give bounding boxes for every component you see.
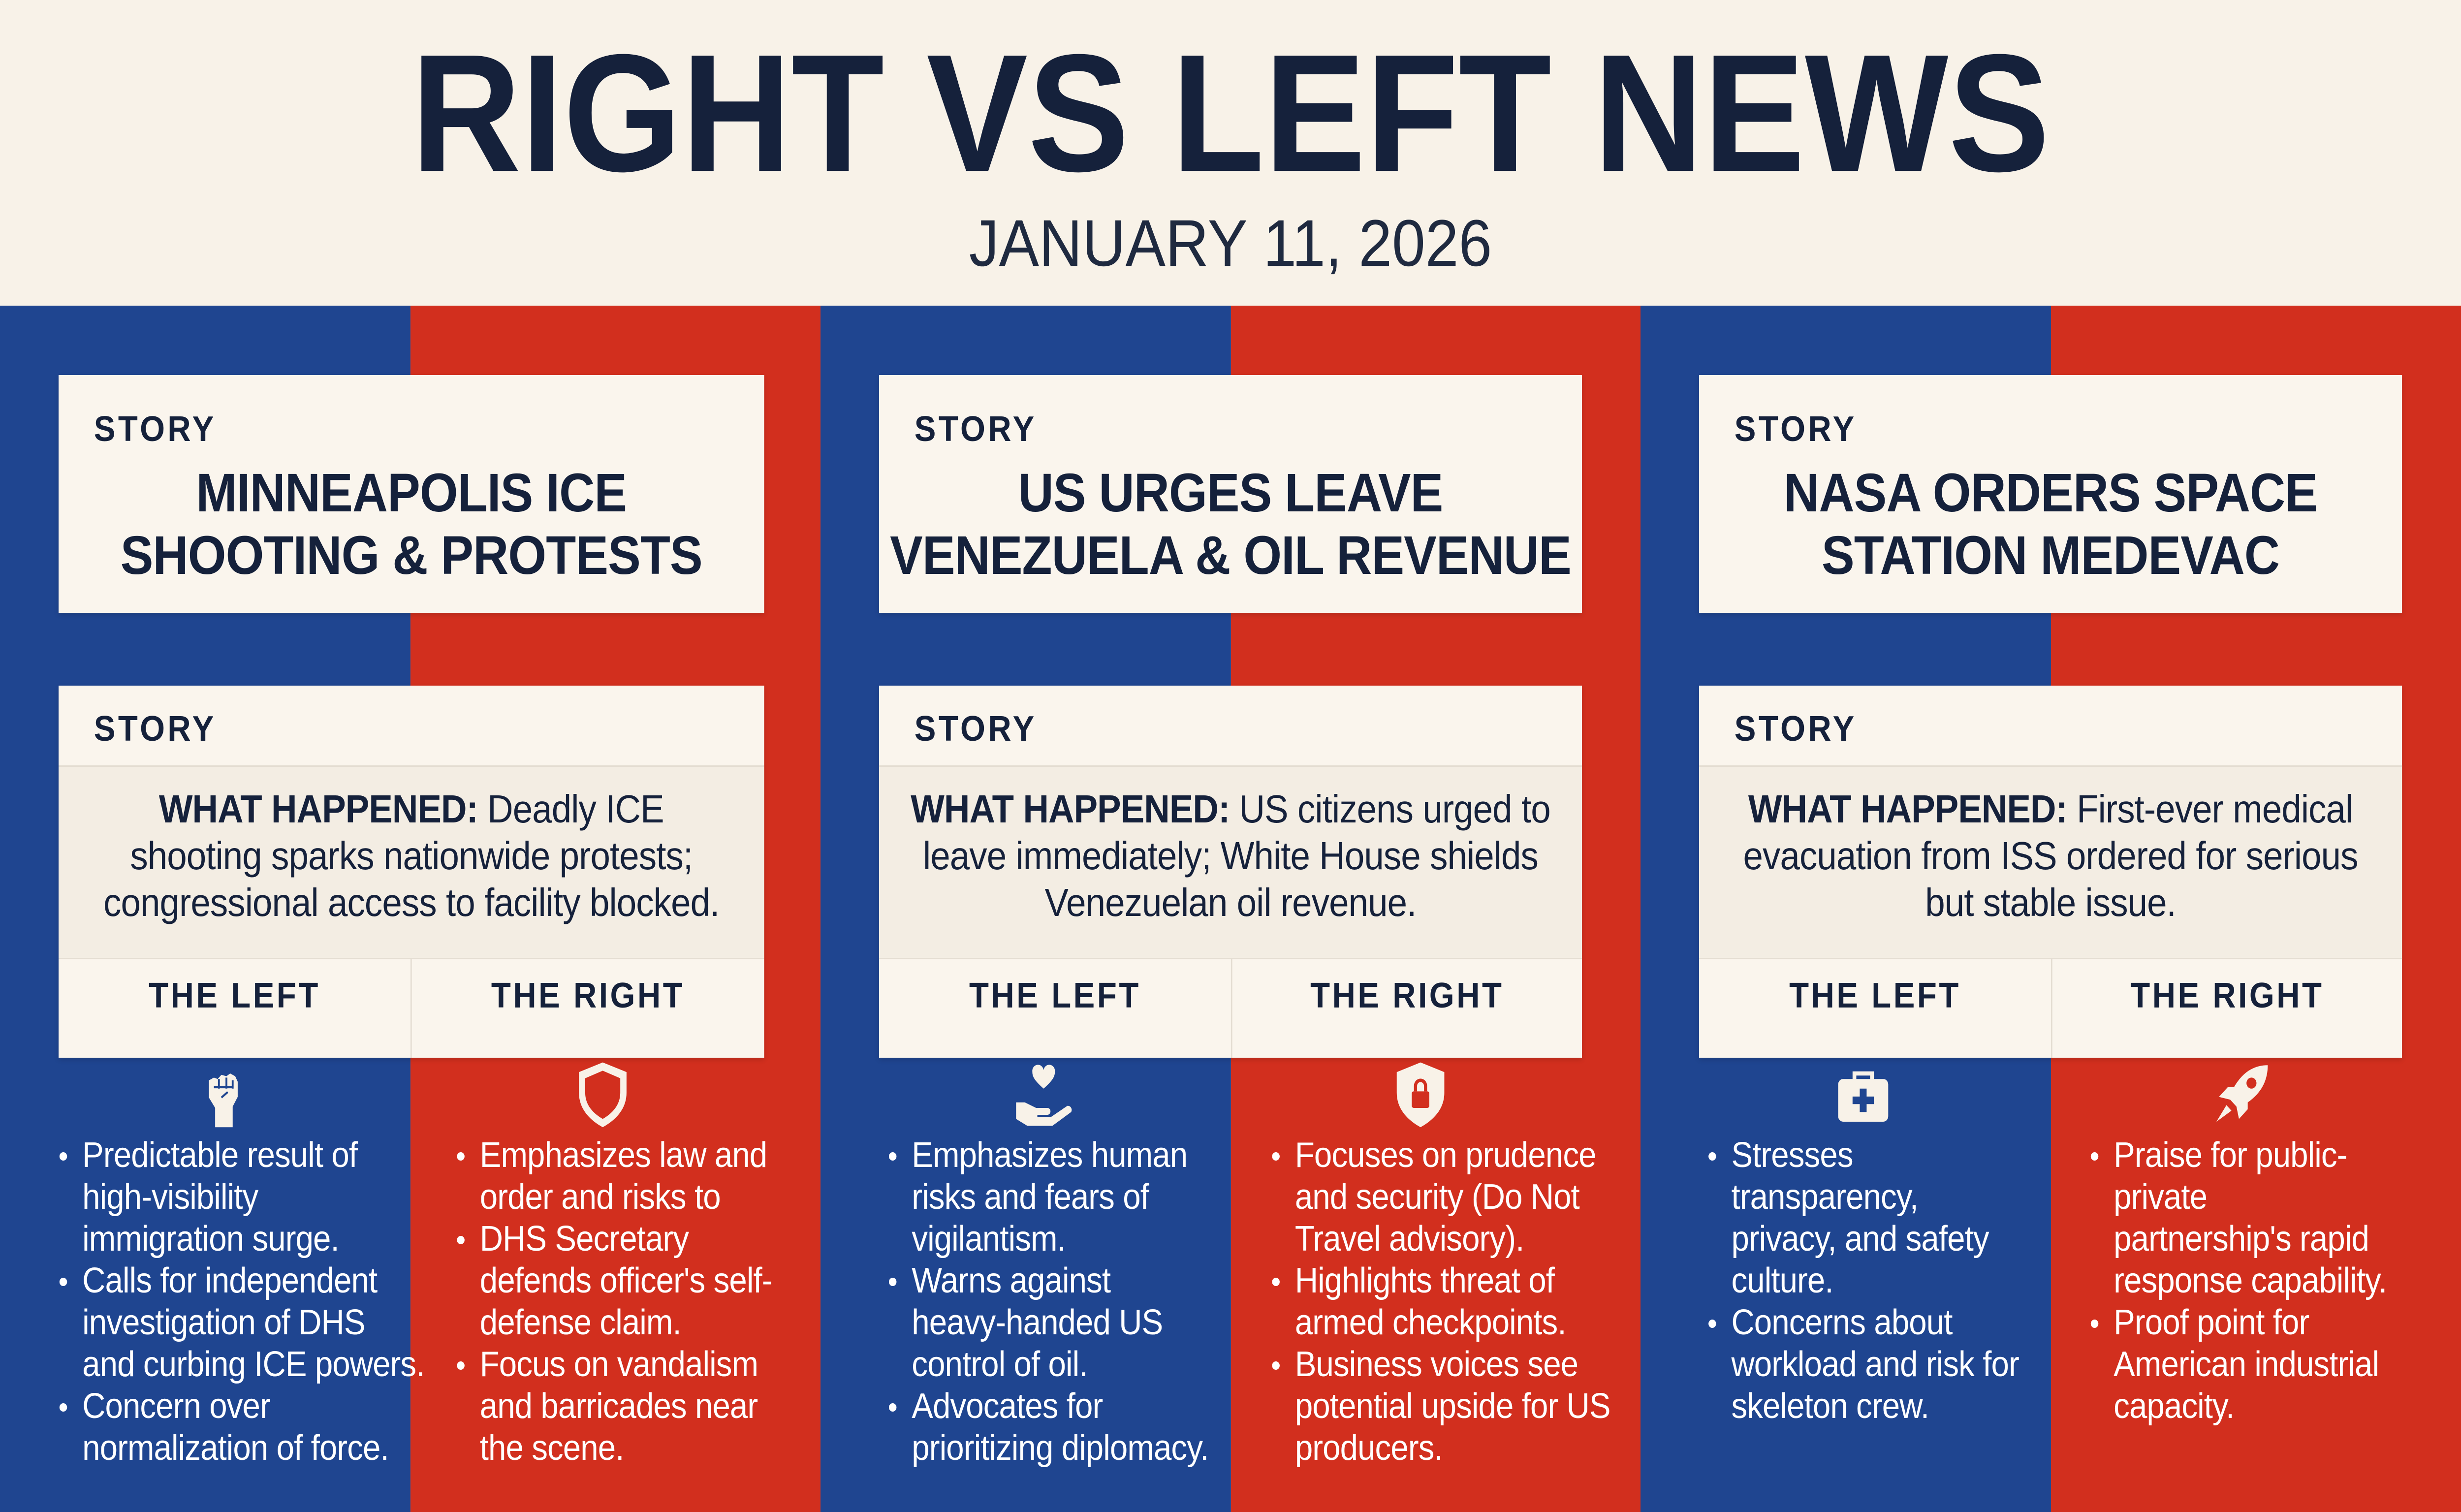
- story box: THE LEFT: [1789, 976, 1961, 1015]
- right bullets: [1272, 1135, 1610, 1468]
- left bullets: culture.: [1731, 1261, 1833, 1300]
- story box: WHAT HAPPENED: Deadly ICE: [159, 787, 664, 831]
- left bullets: Calls for independent: [82, 1261, 377, 1300]
- right bullets: the scene.: [480, 1428, 624, 1468]
- left bullets: Advocates for: [912, 1386, 1103, 1426]
- story box: [879, 686, 1582, 1058]
- right bullets: Business voices see: [1295, 1345, 1578, 1384]
- right bullets: potential upside for US: [1295, 1386, 1610, 1426]
- story box: STORY: [94, 709, 217, 749]
- right bullets: armed checkpoints.: [1295, 1303, 1566, 1342]
- title box: STORY: [915, 410, 1037, 449]
- right bullets: American industrial: [2114, 1345, 2379, 1384]
- story box: WHAT HAPPENED: US citizens urged to: [911, 787, 1550, 831]
- right bullets: and security (Do Not: [1295, 1177, 1579, 1217]
- story box: leave immediately; White House shields: [923, 834, 1538, 878]
- left bullets: [889, 1135, 1208, 1468]
- left bullets: control of oil.: [912, 1345, 1087, 1384]
- story box: Venezuelan oil revenue.: [1045, 881, 1416, 924]
- left bullets: investigation of DHS: [82, 1303, 365, 1342]
- right bullets: response capability.: [2114, 1261, 2387, 1300]
- title box: MINNEAPOLIS ICE: [196, 463, 627, 523]
- date: JANUARY 11, 2026: [969, 207, 1492, 280]
- left bullets: Warns against: [912, 1261, 1110, 1300]
- story box: [59, 686, 764, 1058]
- right bullets: Proof point for: [2114, 1303, 2309, 1342]
- panel: story 3: [1641, 306, 2461, 1512]
- left bullets: privacy, and safety: [1731, 1219, 1989, 1259]
- title box: [1699, 375, 2402, 613]
- left bullets: risks and fears of: [912, 1177, 1149, 1217]
- left bullets: immigration surge.: [82, 1219, 339, 1259]
- right bullets: Travel advisory).: [1295, 1219, 1524, 1259]
- story box: evacuation from ISS ordered for serious: [1743, 834, 2358, 878]
- left bullets: and curbing ICE powers.: [82, 1345, 424, 1384]
- left bullets: Emphasizes human: [912, 1135, 1187, 1175]
- title box: STATION MEDEVAC: [1822, 525, 2279, 586]
- left bullets: heavy-handed US: [912, 1303, 1163, 1342]
- right bullets: Focuses on prudence: [1295, 1135, 1596, 1175]
- left bullets: high-visibility: [82, 1177, 258, 1217]
- title box: STORY: [94, 410, 217, 449]
- story box: WHAT HAPPENED: First-ever medical: [1748, 787, 2353, 831]
- right bullets: Focus on vandalism: [480, 1345, 758, 1384]
- left bullets: [1708, 1135, 2019, 1426]
- title box: [59, 375, 764, 613]
- right bullets: DHS Secretary: [480, 1219, 689, 1259]
- story box: STORY: [1735, 709, 1857, 749]
- right bullets: private: [2114, 1177, 2207, 1217]
- icon: medical kit: [1838, 1071, 1888, 1122]
- title box: NASA ORDERS SPACE: [1784, 463, 2317, 523]
- left bullets: workload and risk for: [1731, 1345, 2019, 1384]
- icon: rocket: [2216, 1065, 2268, 1122]
- story box: THE LEFT: [149, 976, 320, 1015]
- story box: STORY: [915, 709, 1037, 749]
- story box: THE RIGHT: [2130, 976, 2324, 1015]
- left bullets: Stresses: [1731, 1135, 1853, 1175]
- right bullets: Emphasizes law and: [480, 1135, 767, 1175]
- right bullets: Praise for public-: [2114, 1135, 2347, 1175]
- right bullets: defends officer's self-: [480, 1261, 772, 1300]
- story box: THE LEFT: [969, 976, 1141, 1015]
- left bullets: Concerns about: [1731, 1303, 1953, 1342]
- story box: but stable issue.: [1925, 881, 2176, 924]
- title box: [879, 375, 1582, 613]
- left bullets: Concern over: [82, 1386, 270, 1426]
- panel: story 1: [0, 306, 820, 1512]
- icon: shield: [579, 1062, 627, 1127]
- left bullets: prioritizing diplomacy.: [912, 1428, 1208, 1468]
- right bullets: and barricades near: [480, 1386, 757, 1426]
- story box: THE RIGHT: [491, 976, 685, 1015]
- title box: US URGES LEAVE: [1018, 463, 1443, 523]
- story box: [1699, 686, 2402, 1058]
- left bullets: transparency,: [1731, 1177, 1918, 1217]
- title box: VENEZUELA & OIL REVENUE: [890, 525, 1571, 586]
- left bullets: normalization of force.: [82, 1428, 389, 1468]
- right bullets: capacity.: [2114, 1386, 2234, 1426]
- left bullets: [59, 1135, 424, 1468]
- left bullets: skeleton crew.: [1731, 1386, 1929, 1426]
- right bullets: [457, 1135, 772, 1468]
- title box: STORY: [1735, 410, 1857, 449]
- left bullets: vigilantism.: [912, 1219, 1066, 1259]
- right bullets: producers.: [1295, 1428, 1443, 1468]
- right bullets: partnership's rapid: [2114, 1219, 2369, 1259]
- story box: congressional access to facility blocked.: [103, 881, 719, 924]
- right bullets: Highlights threat of: [1295, 1261, 1554, 1300]
- left bullets: Predictable result of: [82, 1135, 357, 1175]
- story box: shooting sparks nationwide protests;: [130, 834, 693, 878]
- story box: THE RIGHT: [1310, 976, 1504, 1015]
- icon: fist: [209, 1073, 238, 1127]
- title box: SHOOTING & PROTESTS: [121, 525, 702, 586]
- right bullets: order and risks to: [480, 1177, 721, 1217]
- right bullets: defense claim.: [480, 1303, 681, 1342]
- icon: heart in hand: [1016, 1065, 1072, 1126]
- title: RIGHT VS LEFT NEWS: [411, 20, 2050, 207]
- right bullets: [2091, 1135, 2387, 1426]
- panel: story 2: [820, 306, 1641, 1512]
- icon: shield lock: [1397, 1062, 1444, 1127]
